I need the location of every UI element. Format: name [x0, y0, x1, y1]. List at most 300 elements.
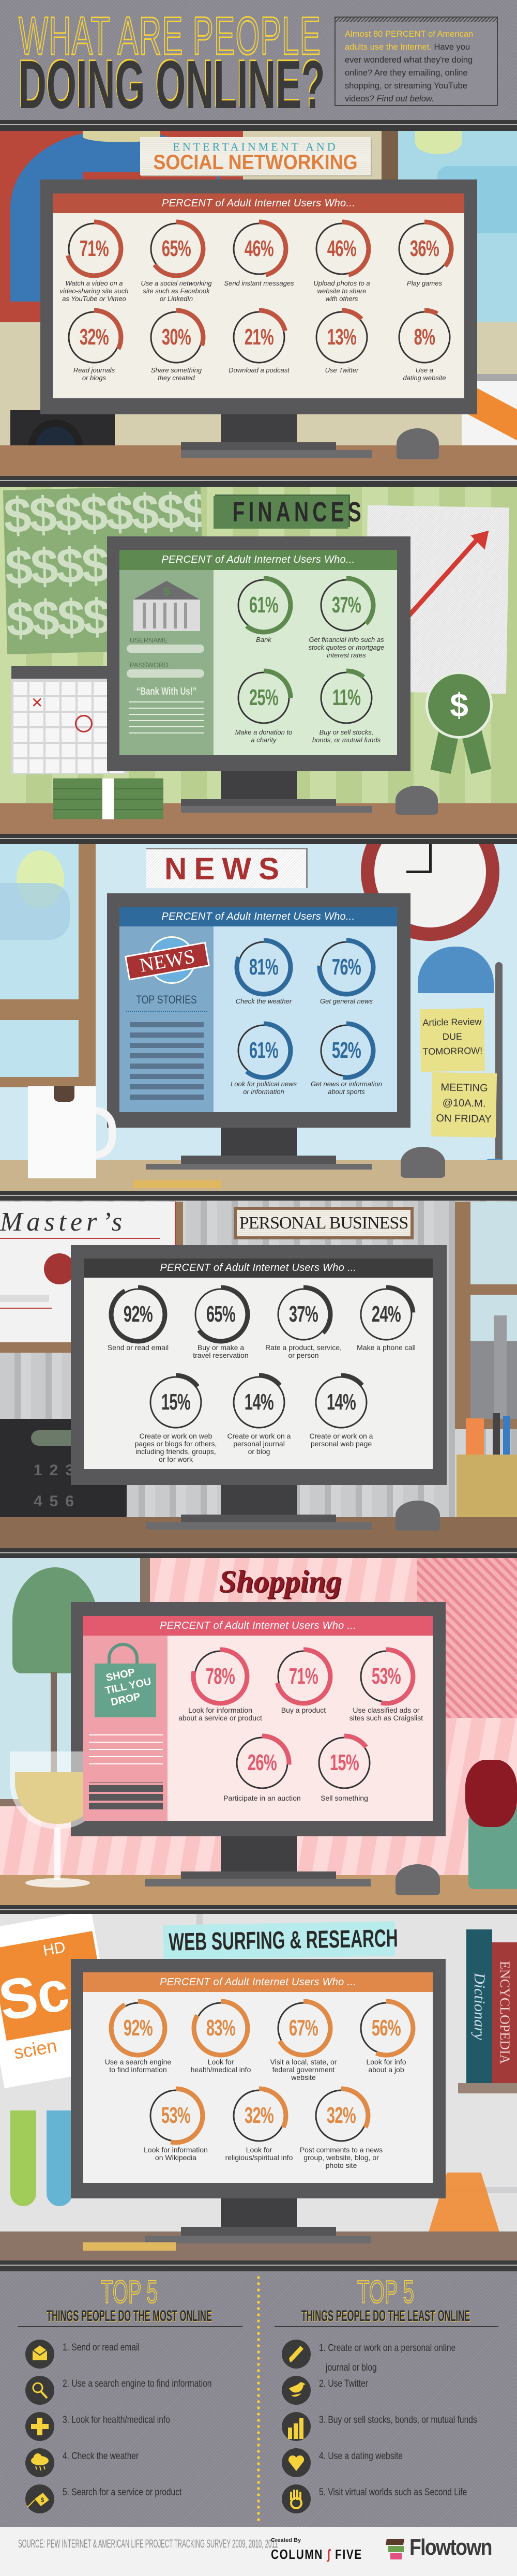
science poster	[0, 1910, 119, 2088]
mouse	[396, 1864, 440, 1895]
label: watch video: as YouTube or Vimeo	[62, 295, 126, 303]
ribbon award: $	[450, 686, 468, 724]
label: web pages for others: or for work	[159, 1455, 193, 1463]
mouse	[401, 1147, 445, 1178]
icon: news globe	[125, 936, 210, 984]
intro text: videos? Find out below.	[345, 94, 434, 103]
label: donation	[235, 728, 292, 744]
panel: shopping	[0, 1558, 517, 1905]
monitor	[71, 1602, 446, 1886]
list: least online: journal or blog	[326, 2362, 377, 2373]
screen: personal business	[84, 1259, 433, 1469]
stat: 65%	[150, 219, 206, 278]
footer	[0, 2527, 517, 2576]
monitor	[107, 893, 410, 1170]
window with tree	[0, 1558, 150, 1806]
chart paper	[364, 505, 509, 694]
label: social networking: Use a social networking	[141, 279, 212, 287]
label: share: they created	[158, 374, 195, 382]
phone: 123	[34, 1462, 81, 1479]
label: post comments: Post comments to a news	[300, 2146, 383, 2154]
wine glass	[10, 1751, 105, 1892]
stat: 71%	[66, 219, 123, 278]
lamp	[418, 947, 505, 1160]
stat: 25%	[238, 668, 293, 724]
icon: bird	[282, 2376, 311, 2405]
stat: 56%: 56%	[372, 2015, 401, 2041]
books: ENCYCLOPEDIA	[497, 1961, 512, 2064]
label: journals: or blogs	[82, 374, 106, 382]
label: web pages for others: Create or work on web	[140, 1432, 212, 1440]
panel: personal business: 789	[34, 1524, 81, 1541]
top stories sidebar: TOP STORIES	[136, 993, 197, 1006]
label: stocks: Buy or sell stocks,	[320, 728, 373, 736]
list: most online: 4. Check the weather	[63, 2451, 139, 2462]
label: political news: Look for political news	[231, 1080, 297, 1088]
camera	[10, 410, 115, 476]
wall lines	[196, 1914, 517, 2193]
stat: 37%	[321, 576, 375, 631]
label: phone call: Make a phone call	[357, 1343, 416, 1352]
stat: 32%: 32%	[80, 324, 109, 350]
label: personal journal: or blog	[248, 1447, 270, 1456]
icon: hand	[282, 2484, 311, 2513]
icon: heart	[282, 2448, 311, 2477]
stat: 13%	[315, 308, 368, 363]
list: least online: 2. Use Twitter	[319, 2378, 368, 2389]
bank login sidebar: “Bank With Us!”	[136, 686, 196, 697]
screen header	[84, 1259, 433, 1278]
label: upload photos: with others	[326, 295, 358, 303]
stat: 32% comments	[310, 2085, 372, 2147]
screen header: PERCENT of Adult Internet Users Who...	[162, 198, 355, 209]
sticky note: meeting: ON FRIDAY	[436, 1113, 492, 1125]
stat: 13%: 13%	[327, 324, 356, 350]
label: personal web page: Create or work on a	[310, 1432, 373, 1440]
stat: 32% religious	[228, 2085, 290, 2147]
label: job	[340, 2058, 433, 2074]
label: rate: Rate a product, service,	[265, 1343, 342, 1352]
icon: shopping bag: TILL YOU	[104, 1676, 152, 1697]
stat: 32%	[68, 308, 123, 363]
label: web pages for others: pages or blogs for others,	[135, 1440, 217, 1448]
stat: 21%: 21%	[245, 324, 273, 350]
stat: 26%	[231, 1732, 293, 1794]
stat: 71%: 71%	[289, 1664, 318, 1689]
label: health: health/medical info	[191, 2065, 251, 2074]
desk	[0, 1160, 517, 1191]
panel: top 5 lists	[0, 2271, 517, 2527]
list: least online: 4. Use a dating website	[319, 2451, 403, 2462]
label: sell: Sell something	[321, 1794, 368, 1802]
label: religious	[212, 2146, 306, 2162]
panel: web surfing and research	[0, 1914, 517, 2260]
icon: rain cloud	[25, 2448, 54, 2477]
stat: 83%: 83%	[206, 2015, 235, 2041]
icon: shopping bag: DROP	[110, 1691, 142, 1708]
logo: column five: Created By	[271, 2537, 301, 2543]
poster: superhero	[0, 131, 243, 322]
label: classified ads: Use classified ads or	[353, 1706, 420, 1714]
logo: flowtown: Flowtown	[409, 2535, 492, 2560]
stat: 37% rate	[272, 1283, 334, 1345]
sticky note: meeting	[431, 1072, 497, 1137]
banner: web surfing and research: WEB SURFING & RESEARCH	[169, 1925, 398, 1956]
mug	[28, 1086, 116, 1178]
stat: 14% web page: 14%	[327, 1389, 356, 1415]
label: sports: about sports	[328, 1088, 365, 1096]
desk	[0, 1517, 517, 1548]
mouse	[396, 786, 438, 815]
bank login sidebar: USERNAME	[130, 636, 168, 644]
stat: 83%	[190, 1997, 252, 2059]
intro text: ever wondered what they're doing	[345, 55, 473, 65]
stat: 52%	[321, 1021, 375, 1080]
label: sports	[311, 1080, 382, 1096]
books: Dictionary	[471, 1973, 488, 2040]
stat: 14% journal	[228, 1371, 290, 1433]
phone	[0, 1419, 127, 1530]
list: most online: 2. Use a search engine to find information	[63, 2378, 211, 2389]
stat: 56%	[355, 1997, 417, 2059]
logo: column five	[271, 2536, 371, 2567]
screen: entertainment	[53, 193, 464, 398]
stat: 46%	[233, 219, 288, 277]
stat: 11%	[321, 668, 372, 724]
heading: top 5 least: THINGS PEOPLE DO THE LEAST ONLINE	[301, 2308, 470, 2325]
calendar: ✕	[31, 695, 43, 711]
logo: column five: COLUMN ʃ FIVE	[271, 2547, 362, 2562]
screen: news	[119, 907, 397, 1112]
label: post comments: group, website, blog, or	[303, 2153, 379, 2162]
screen: web surfing	[83, 1972, 433, 2183]
icon: pencil	[282, 2340, 311, 2369]
stat: 46% upload	[315, 219, 371, 277]
stat: 61% political	[238, 1021, 293, 1080]
label: instant messages: Send instant messages	[224, 279, 294, 287]
label: post comments	[295, 2146, 388, 2169]
plaque: personal business	[234, 1207, 414, 1239]
banner: news	[146, 848, 308, 888]
window	[0, 844, 96, 1087]
label: share	[151, 366, 202, 382]
pencil cup	[457, 1413, 517, 1517]
label: dating: dating website	[403, 374, 446, 382]
label: weather: Check the weather	[236, 997, 292, 1005]
phone: 456	[34, 1493, 81, 1510]
monitor	[71, 1959, 446, 2243]
banner: news: NEWS	[164, 851, 286, 886]
label: look for information: about a service or product	[178, 1714, 262, 1722]
banner: finances: FINANCES	[233, 497, 365, 528]
label: personal web page	[295, 1432, 388, 1448]
panel: news	[0, 844, 517, 1191]
stat: 65% travel: 65%	[206, 1301, 235, 1327]
label: donation: a charity	[251, 736, 277, 744]
title: shopping: Shopping	[219, 1564, 341, 1598]
desk	[0, 2231, 517, 2260]
label: personal journal	[212, 1432, 306, 1456]
label: wikipedia: on Wikipedia	[155, 2153, 196, 2162]
banner: entertainment and social networking	[140, 137, 371, 175]
stat: 92% search	[107, 1997, 169, 2059]
divider: dotted	[257, 2274, 260, 2521]
label: bank: Bank	[256, 636, 271, 643]
label: political news: or information	[243, 1088, 284, 1096]
label: government: website	[291, 2073, 316, 2081]
label: watch video	[60, 279, 128, 303]
stat: 78%	[189, 1645, 251, 1708]
vase with flowers	[455, 1760, 517, 1889]
label: travel	[174, 1344, 267, 1359]
stat: 21%	[233, 308, 287, 363]
label: post comments: photo site	[326, 2161, 357, 2169]
stat: 65%: 65%	[162, 236, 191, 261]
label: classified ads	[340, 1706, 433, 1722]
bank login sidebar	[119, 570, 214, 755]
label: web pages for others	[129, 1432, 222, 1463]
stat: 32% religious: 32%	[245, 2103, 273, 2128]
stat: 14% journal: 14%	[245, 1389, 273, 1415]
panel: personal business	[0, 1201, 517, 1548]
stat: 81% weather	[235, 938, 293, 996]
heading: top 5 most	[16, 2279, 243, 2328]
plaque: personal business: PERSONAL BUSINESS	[239, 1214, 408, 1233]
window	[382, 131, 517, 322]
heading: top 5 least	[274, 2279, 501, 2328]
pencil	[133, 1180, 221, 1188]
label: podcast: Download a podcast	[229, 366, 290, 374]
diploma: Master’s	[0, 1207, 126, 1237]
pencil	[83, 2242, 176, 2251]
label: wikipedia: Look for information	[144, 2146, 208, 2154]
stat: 65% travel	[190, 1283, 252, 1345]
logo: flowtown	[386, 2535, 498, 2566]
label: email: Send or read email	[108, 1343, 169, 1352]
list: least online	[282, 2340, 504, 2515]
label: rate	[257, 1344, 350, 1359]
icon: envelope	[25, 2340, 54, 2369]
stat: 36%: 36%	[410, 236, 439, 261]
list: most online: 1. Send or read email	[63, 2342, 140, 2353]
screen header: PERCENT of Adult Internet Users Who ...	[160, 1262, 356, 1274]
label: upload photos: website to share	[317, 287, 366, 295]
label: search engine: to find information	[109, 2065, 167, 2074]
header section	[0, 0, 517, 120]
label: dating	[403, 366, 446, 382]
top stories sidebar	[119, 926, 214, 1112]
stat: 8%: 8%	[414, 324, 435, 350]
label: personal journal: Create or work on a	[227, 1432, 291, 1440]
stat: 53%	[145, 2085, 207, 2147]
wallpaper	[417, 1558, 517, 1718]
panel: finances	[0, 487, 517, 834]
source text: SOURCE: PEW INTERNET & AMERICAN LIFE PROJECT TRACKING SURVEY 2009, 2010, 2011	[18, 2537, 278, 2550]
label: government	[257, 2058, 350, 2081]
stat: 52%: 52%	[332, 1038, 361, 1063]
screen header: PERCENT of Adult Internet Users Who ...	[160, 1976, 356, 1988]
label: social networking: site such as Facebook	[143, 287, 210, 295]
list: least online: 1. Create or work on a personal online	[319, 2343, 455, 2354]
stat: 24% phone	[355, 1283, 417, 1345]
list: most online: 3. Look for health/medical info	[63, 2415, 170, 2425]
stat: 67%	[272, 1997, 334, 2059]
label: donation: Make a donation to	[235, 728, 292, 736]
heading: top 5 most: TOP 5	[101, 2274, 158, 2310]
stat: 53%	[355, 1645, 417, 1708]
label: share: Share something	[151, 366, 202, 374]
screen header: PERCENT of Adult Internet Users Who...	[161, 554, 355, 565]
label: financial info: interest rates	[327, 651, 366, 659]
sticky note: article review	[420, 1008, 485, 1072]
diploma	[0, 1202, 183, 1353]
stat: 67%: 67%	[289, 2015, 318, 2041]
label: travel: Buy or make a	[197, 1343, 244, 1352]
title: what are people: WHAT ARE PEOPLE	[19, 6, 321, 66]
sticky note: meeting: MEETING	[440, 1082, 488, 1094]
stat: 15%: 15%	[330, 1750, 359, 1775]
intro text: shopping, or streaming YouTube	[345, 81, 467, 91]
mouse	[396, 1501, 440, 1531]
intro text: online? Are they emailing, online	[345, 68, 468, 78]
label: job: Look for info	[366, 2058, 406, 2066]
icon: bank: $	[163, 585, 170, 598]
stat: 32% comments: 32%	[327, 2103, 356, 2128]
label: stocks: bonds, or mutual funds	[312, 736, 381, 744]
label: financial info: Get financial info such as	[309, 636, 384, 643]
label: dating: Use a	[416, 366, 433, 374]
stat: 15%: 15%	[161, 1389, 190, 1415]
screen: finances	[119, 550, 397, 755]
clock	[361, 802, 499, 941]
intro text	[345, 29, 473, 103]
stat: 92% email	[107, 1283, 169, 1345]
money stacks	[53, 778, 163, 819]
window: city	[455, 1202, 517, 1429]
stat: 15%	[313, 1732, 375, 1794]
icon: bank	[133, 581, 200, 631]
label: government: federal government	[272, 2065, 334, 2074]
stat: 26%: 26%	[248, 1750, 277, 1775]
stat: 24% phone: 24%	[372, 1301, 401, 1327]
desk	[0, 803, 517, 834]
icon: price tag	[25, 2484, 54, 2513]
label: government: Visit a local, state, or	[270, 2058, 337, 2066]
label: journals: Read journals	[73, 366, 115, 374]
stat: 46%: 46%	[245, 236, 273, 261]
stat: 36%	[398, 219, 454, 275]
list: most online: 5. Search for a service or product	[63, 2487, 181, 2498]
science poster: HD	[42, 1939, 67, 1959]
label: search engine: Use a search engine	[105, 2058, 171, 2066]
label: rate: or person	[288, 1351, 319, 1359]
sticky note: article review: Article Review	[422, 1016, 482, 1028]
label: personal web page: personal web page	[311, 1440, 372, 1448]
label: political news	[231, 1080, 297, 1096]
stat: 25%: 25%	[249, 685, 278, 710]
icon: news globe: NEWS	[138, 946, 196, 977]
label: health: Look for	[208, 2058, 234, 2066]
screen header	[83, 1972, 433, 1992]
label: wikipedia	[129, 2146, 222, 2162]
science poster: scien	[12, 2035, 58, 2063]
label: religious: Look for	[246, 2146, 272, 2154]
label: web pages for others: including friends, groups,	[135, 1447, 216, 1456]
label: social networking: or LinkedIn	[160, 295, 193, 303]
stat: 53%: 53%	[372, 1664, 401, 1689]
list: least online: 5. Visit virtual worlds such as Second Life	[319, 2487, 467, 2498]
stat: 53%: 53%	[161, 2103, 190, 2128]
stat: 61% political: 61%	[249, 1038, 278, 1063]
bank login sidebar: PASSWORD	[130, 661, 169, 669]
stat: 76%: 76%	[332, 954, 361, 980]
label: travel: travel reservation	[193, 1351, 249, 1359]
icon: magnifier	[25, 2376, 54, 2405]
label: sports: Get news or information	[311, 1080, 382, 1088]
stat: 30%	[150, 308, 206, 363]
monitor	[107, 536, 410, 813]
label: twitter: Use Twitter	[325, 366, 358, 374]
label: job: about a job	[368, 2065, 404, 2074]
label: upload photos: Upload photos to a	[313, 279, 370, 287]
stat: 76%	[317, 938, 375, 996]
label: play games: Play games	[407, 279, 442, 287]
stat: 61% bank	[238, 576, 293, 634]
books	[466, 1929, 517, 2083]
label: auction: Participate in an auction	[223, 1794, 301, 1802]
monitor	[40, 179, 477, 458]
label: stocks	[312, 728, 381, 744]
label: watch video: Watch a video on a	[65, 279, 123, 287]
label: journals	[73, 366, 115, 382]
label: classified ads: sites such as Craigslist	[349, 1714, 423, 1722]
stat: 14% web page	[310, 1371, 372, 1433]
sticky note: article review: TOMORROW!	[422, 1045, 482, 1057]
label: look for information	[174, 1706, 267, 1722]
icon: shopping bag: SHOP	[105, 1667, 136, 1684]
desk	[0, 1875, 517, 1905]
icon: price tag: $	[41, 2496, 44, 2504]
cup	[462, 374, 517, 476]
banner: entertainment and social networking: SOCIAL NETWORKING	[153, 151, 358, 174]
label: watch video: video-sharing site such	[60, 287, 128, 295]
heading: top 5 least: TOP 5	[357, 2274, 414, 2310]
stat: 81% weather: 81%	[249, 954, 278, 980]
heading: top 5 most: THINGS PEOPLE DO THE MOST ONLINE	[47, 2308, 212, 2325]
intro text: Almost 80 PERCENT of American	[345, 29, 473, 39]
label: financial info	[308, 636, 384, 659]
screen header	[119, 907, 397, 926]
stat: 8%	[398, 308, 451, 363]
sticky note: meeting: @10A.M.	[443, 1097, 486, 1110]
stat: 11%: 11%	[332, 685, 360, 710]
label: social networking	[141, 279, 212, 303]
stat: 92% search: 92%	[124, 2015, 153, 2041]
screen header	[53, 193, 464, 213]
stat: 71%	[272, 1645, 334, 1708]
label: religious: religious/spiritual info	[225, 2153, 293, 2162]
sticky note: article review: DUE	[443, 1031, 462, 1042]
stat: 15%	[145, 1371, 207, 1433]
label: search engine	[92, 2058, 185, 2074]
panel: entertainment and social networking	[0, 131, 517, 476]
screen header	[83, 1616, 433, 1636]
desk	[0, 445, 517, 476]
screen header: PERCENT of Adult Internet Users Who...	[161, 911, 355, 922]
icon: bar chart	[282, 2412, 311, 2441]
icon: medical cross	[25, 2412, 54, 2441]
label: upload photos	[313, 279, 370, 303]
